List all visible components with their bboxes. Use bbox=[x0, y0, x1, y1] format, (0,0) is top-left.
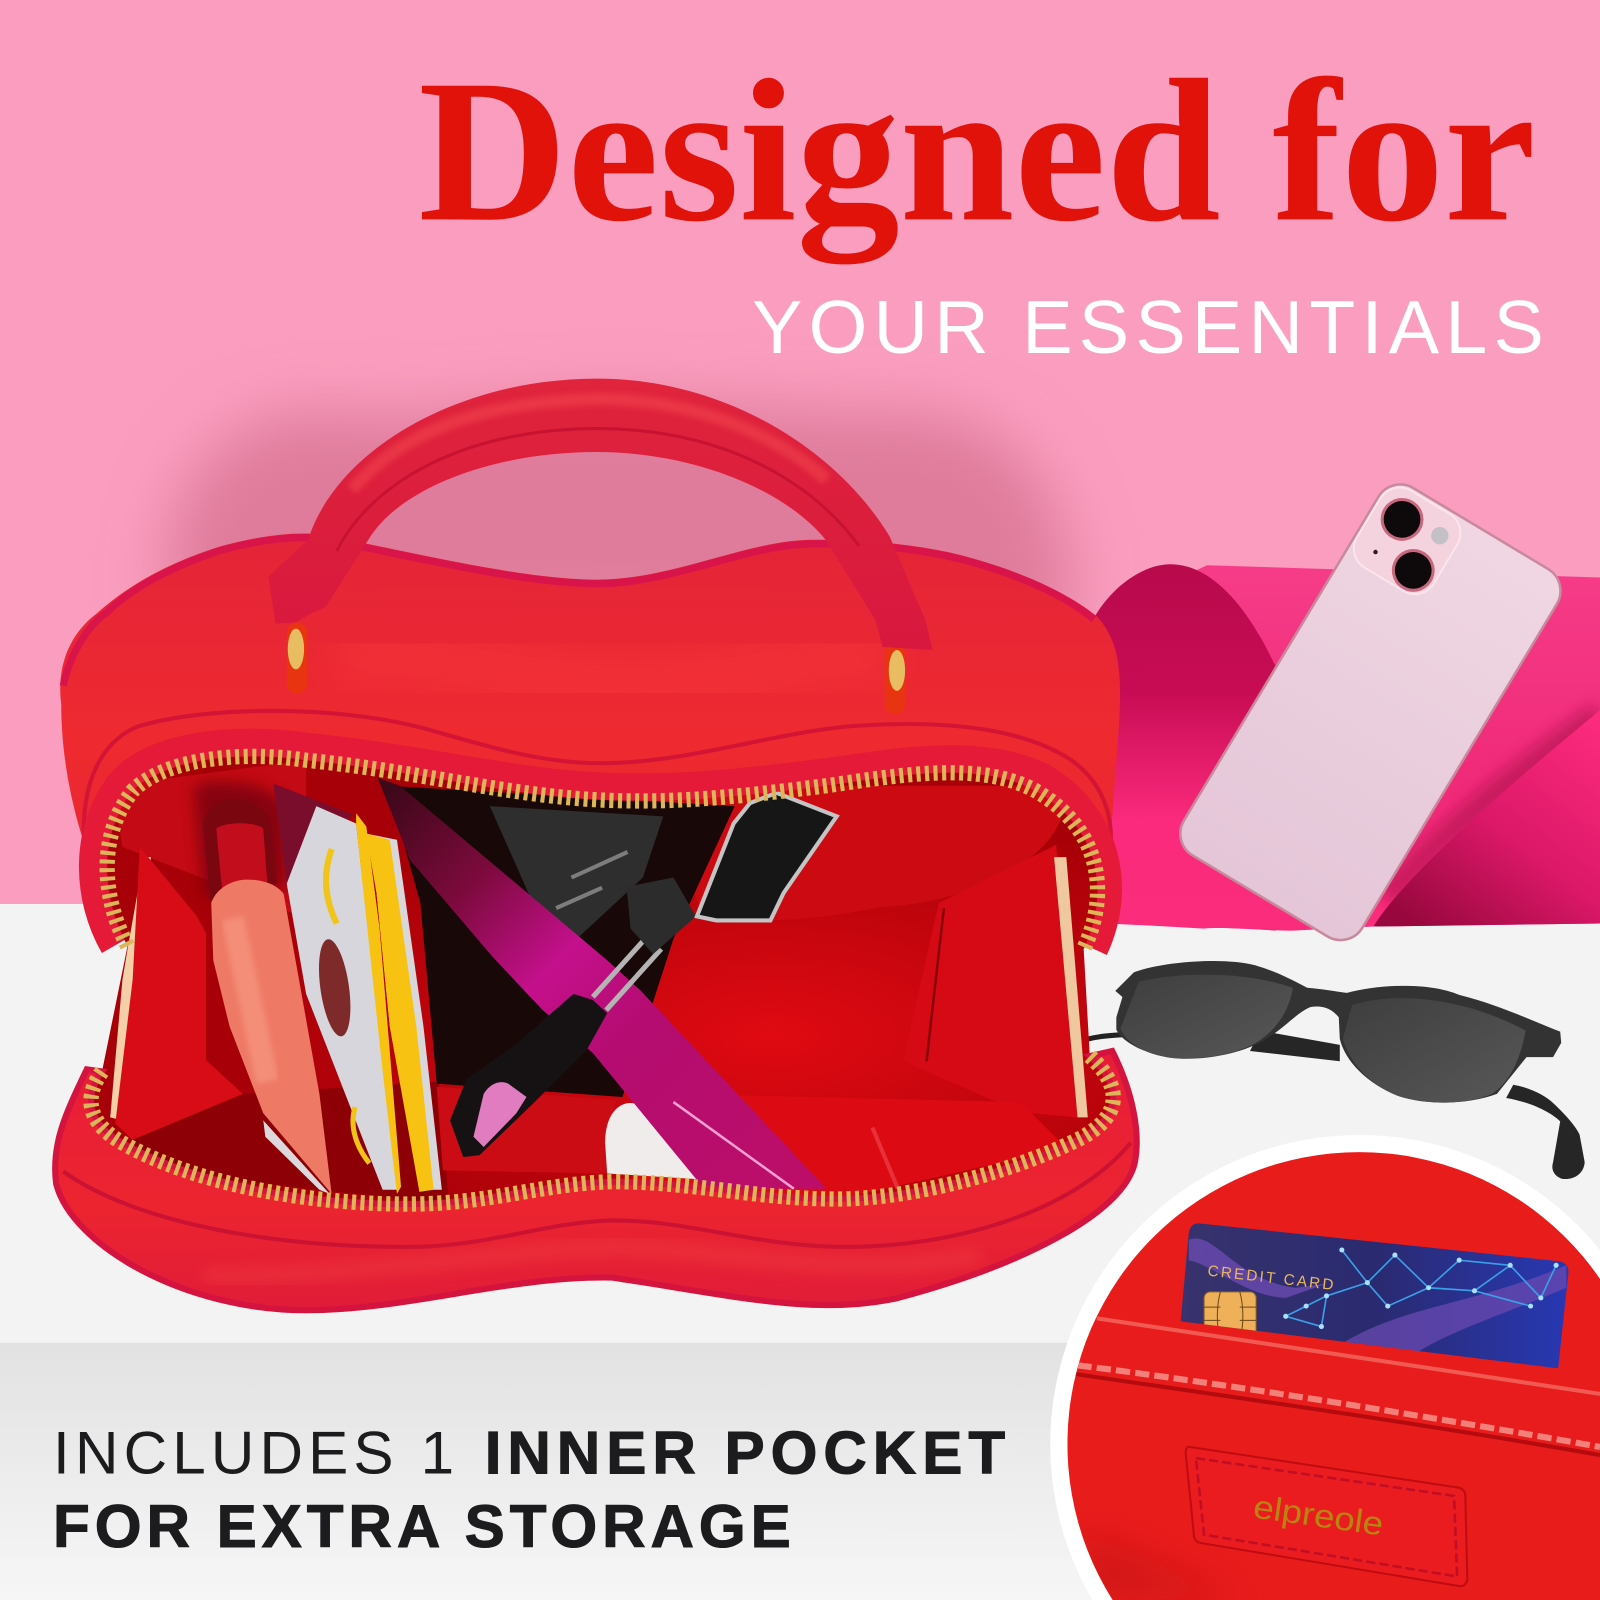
left top fabric bbox=[112, 760, 306, 918]
icon: phone bbox=[1171, 475, 1570, 950]
zipper tape top bbox=[93, 743, 1108, 949]
background: white table bbox=[0, 904, 1600, 1343]
dark items behind bbox=[388, 786, 735, 1097]
right wall panel bbox=[903, 845, 1078, 1117]
zipper top teeth bbox=[107, 756, 1098, 949]
lash curler pivot bbox=[627, 878, 696, 954]
lash curler rods bbox=[593, 937, 661, 1010]
bag front lip bbox=[55, 1051, 1137, 1310]
upper right fabric bbox=[653, 786, 1064, 921]
handbag bbox=[55, 379, 1143, 1310]
left floor bbox=[122, 1082, 449, 1204]
right hardware bbox=[885, 643, 905, 714]
right lens bbox=[1343, 998, 1526, 1103]
subtitle: YOUR ESSENTIALS bbox=[752, 286, 1544, 370]
handle sheen bbox=[352, 399, 827, 490]
flap rim highlight bbox=[63, 538, 1094, 686]
pocket shadow bbox=[1071, 1373, 1600, 1455]
sunglasses frame bbox=[1115, 961, 1561, 1103]
left lens bbox=[1120, 975, 1293, 1058]
paper back sheet bbox=[1096, 565, 1600, 931]
left upper shadow bbox=[194, 782, 286, 898]
mascara tube bbox=[378, 778, 827, 1189]
cream strip right bbox=[1054, 857, 1088, 1117]
wallet yellow band bbox=[356, 813, 401, 1194]
flap seam bbox=[84, 711, 1111, 878]
lip gloss cap bbox=[203, 799, 277, 900]
flap sheen bbox=[337, 653, 888, 684]
card purple swoosh bbox=[1189, 1238, 1327, 1298]
card purple swoosh right bbox=[1337, 1265, 1566, 1367]
bag back flap bbox=[60, 534, 1120, 949]
patch base bbox=[1186, 1447, 1467, 1586]
patterned wallet bbox=[287, 806, 397, 1190]
floor bbox=[632, 1096, 1061, 1196]
wallet banana bottom bbox=[353, 1107, 369, 1163]
pouch glare bbox=[556, 852, 628, 908]
lip gloss tube bbox=[211, 880, 332, 1194]
brand name: elpreole bbox=[1251, 1488, 1386, 1542]
felt background bbox=[1061, 1148, 1600, 1600]
folded temple bbox=[1250, 1031, 1340, 1061]
right temple bbox=[1506, 1085, 1585, 1179]
handle bbox=[268, 379, 933, 714]
lip sheen bbox=[204, 1247, 980, 1276]
card base bbox=[1179, 1219, 1571, 1372]
back wall bbox=[82, 745, 1143, 1214]
second wallet yellow bbox=[366, 834, 434, 1192]
card chip bbox=[1204, 1292, 1256, 1339]
lip seam bbox=[63, 1143, 1131, 1247]
caption lead: INCLUDES 1 bbox=[53, 1419, 454, 1486]
crease shadow bbox=[1388, 714, 1600, 898]
floor fold bbox=[872, 1128, 898, 1189]
seam stitches bbox=[1078, 1365, 1600, 1447]
handle strap bbox=[268, 379, 933, 650]
title: Designed for bbox=[418, 38, 1536, 264]
card label: CREDIT CARD bbox=[1207, 1263, 1334, 1294]
lip gloss end bbox=[263, 1120, 330, 1194]
wallet top corner bbox=[273, 784, 352, 884]
cream strip left bbox=[110, 857, 151, 1119]
wallet figure bbox=[319, 939, 350, 1036]
card network nodes bbox=[1283, 1247, 1559, 1329]
heart grip bbox=[473, 1082, 527, 1147]
lash curler handle bbox=[450, 994, 607, 1157]
pink paper roll bbox=[1095, 564, 1600, 931]
paper lower sheet bbox=[1373, 710, 1600, 927]
lip gloss shine bbox=[233, 918, 267, 1082]
wallet banana top bbox=[326, 849, 337, 923]
phone body bbox=[1171, 475, 1570, 950]
mascara highlight bbox=[673, 1102, 794, 1189]
felt lower shade bbox=[1082, 1531, 1245, 1600]
right pocket fold bbox=[927, 908, 944, 1061]
inset: pocket close-up bbox=[1050, 1135, 1600, 1600]
caption bbox=[53, 1419, 1005, 1560]
lip gloss collar bbox=[216, 823, 267, 894]
paper dark fold bbox=[1095, 564, 1306, 931]
pocket band bbox=[1061, 1316, 1600, 1449]
left temple bbox=[1080, 1035, 1122, 1042]
second wallet edge bbox=[366, 834, 442, 1190]
clear pouch bbox=[490, 806, 663, 944]
credit card bbox=[1179, 1219, 1571, 1372]
left hardware bbox=[287, 622, 307, 694]
lip balm cap bbox=[605, 1103, 705, 1180]
zipper bottom teeth bbox=[91, 1056, 1113, 1204]
inset ring bbox=[1050, 1135, 1600, 1600]
bag interior bbox=[82, 745, 1143, 1214]
patch stitches bbox=[1196, 1458, 1457, 1577]
handle stitch bbox=[337, 429, 859, 551]
background: pink wall bbox=[0, 0, 1600, 904]
caption emphasis: INNER POCKET bbox=[485, 1419, 1005, 1486]
left pocket panel bbox=[115, 847, 243, 1140]
background: grey band bbox=[0, 1343, 1600, 1600]
pocket highlight bbox=[1097, 1318, 1600, 1394]
lip balm bbox=[437, 1087, 616, 1173]
icon: sunglasses bbox=[1080, 961, 1585, 1179]
caption line 2: FOR EXTRA STORAGE bbox=[53, 1493, 791, 1560]
inset content bbox=[1061, 1148, 1600, 1600]
brand patch bbox=[1186, 1447, 1467, 1586]
phone camera module bbox=[1346, 479, 1469, 602]
bag shadow on wall bbox=[166, 403, 1072, 633]
card network lines bbox=[1286, 1250, 1556, 1327]
lash curler head bbox=[697, 793, 837, 920]
